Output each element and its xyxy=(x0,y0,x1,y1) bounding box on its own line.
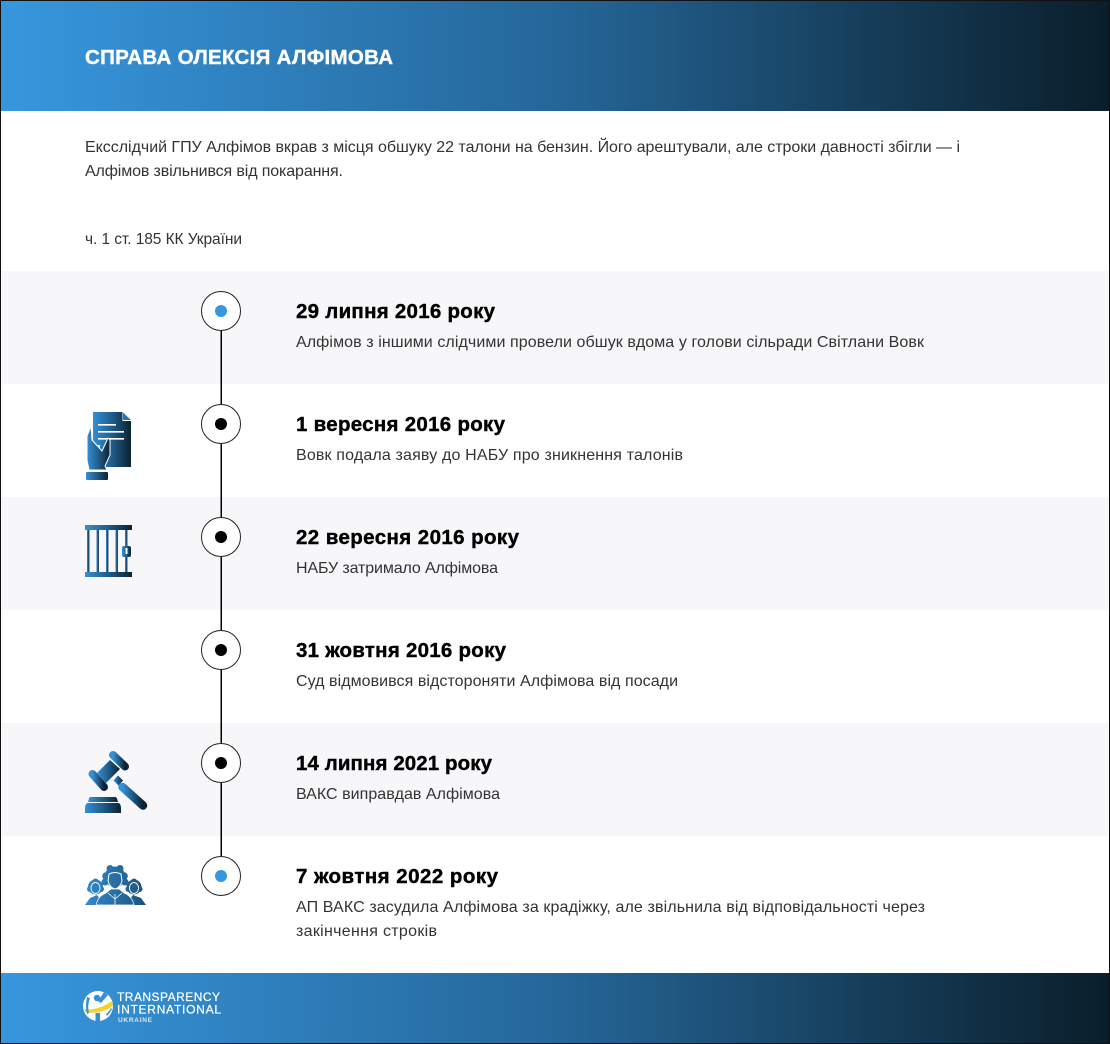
marker: 7 October 2022 xyxy=(202,856,240,896)
event: 14 July 2021: 14 липня 2021 року xyxy=(296,752,493,775)
logo: Transparency International Ukraine: INTERNATIONAL xyxy=(117,1002,221,1016)
header band xyxy=(0,0,1110,111)
event: 1 September 2016: 1 вересня 2016 року xyxy=(296,413,506,436)
icon: panel of judges xyxy=(85,865,146,905)
event: 29 July 2016 xyxy=(296,300,925,351)
event: 1 September 2016: Вовк подала заяву до НАБУ про зникнення талонів xyxy=(296,447,683,464)
icon: gavel xyxy=(85,755,143,813)
event: 31 October 2016 xyxy=(296,639,678,690)
row backgrounds xyxy=(0,271,1110,836)
event: 22 September 2016 xyxy=(296,526,520,577)
event: 29 July 2016: 29 липня 2016 року xyxy=(296,300,496,323)
intro text: Ексслідчий ГПУ Алфімов вкрав з місця обшуку 22 талони на бензин. Його арештували, але строки давності збігли — і xyxy=(85,137,960,156)
event: 1 September 2016 xyxy=(296,413,683,464)
marker: 31 October 2016 xyxy=(202,630,240,670)
right judge xyxy=(125,878,146,905)
event: 7 October 2022: 7 жовтня 2022 року xyxy=(296,865,499,888)
left judge xyxy=(85,878,104,905)
event: 14 July 2021: ВАКС виправдав Алфімова xyxy=(296,786,500,803)
event: 29 July 2016: Алфімов з іншими слідчими провели обшук вдома у голови сільради Світлани Вовк xyxy=(296,334,925,351)
marker: 29 July 2016 xyxy=(202,292,240,330)
icon: prison bars xyxy=(85,525,132,577)
marker: 1 September 2016 xyxy=(202,404,240,444)
event: 7 October 2022: АП ВАКС засудила Алфімова за крадіжку, але звільнила від відповідальності через xyxy=(296,899,925,916)
title: СПРАВА ОЛЕКСІЯ АЛФІМОВА xyxy=(85,46,393,69)
logo: Transparency International Ukraine: UKRAINE xyxy=(118,1017,153,1024)
event: 14 July 2021 xyxy=(296,752,500,803)
centre judge xyxy=(96,865,134,905)
logo: Transparency International Ukraine xyxy=(83,990,221,1024)
marker: 14 July 2021 xyxy=(202,744,240,782)
marker: 22 September 2016 xyxy=(202,518,240,556)
intro text xyxy=(85,137,960,180)
icon: hand holding document xyxy=(86,412,132,480)
intro text: Алфімов звільнився від покарання. xyxy=(85,163,343,180)
event: 7 October 2022: закінчення строків xyxy=(296,923,437,940)
legal article: ч. 1 ст. 185 КК України xyxy=(85,231,242,248)
timeline xyxy=(202,292,240,896)
footer band xyxy=(0,973,1110,1044)
event: 31 October 2016: Суд відмовився відстороняти Алфімова від посади xyxy=(296,673,678,690)
event: 7 October 2022 xyxy=(296,865,925,940)
event: 22 September 2016: НАБУ затримало Алфімова xyxy=(296,560,498,577)
event: 22 September 2016: 22 вересня 2016 року xyxy=(296,526,520,549)
logo: Transparency International Ukraine: TRANSPARENCY xyxy=(117,990,220,1004)
event: 31 October 2016: 31 жовтня 2016 року xyxy=(296,639,507,662)
